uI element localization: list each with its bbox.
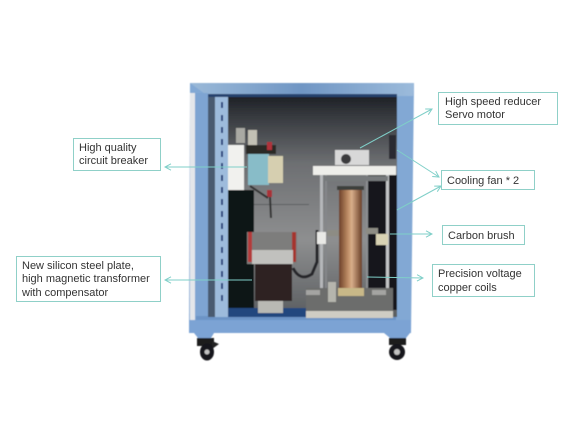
cabinet interior bbox=[228, 97, 397, 317]
label: servo motor: High speed reducer bbox=[445, 96, 541, 108]
label: circuit breaker: High quality bbox=[79, 142, 137, 154]
right caster bbox=[384, 333, 410, 360]
label: cooling fan bbox=[442, 170, 534, 190]
label: transformer bbox=[16, 256, 160, 302]
circuit breaker assembly bbox=[228, 128, 283, 218]
label: servo motor bbox=[438, 92, 558, 124]
label: copper coils: copper coils bbox=[438, 282, 497, 294]
transformer bbox=[247, 230, 317, 313]
label: transformer: with compensator bbox=[21, 287, 109, 299]
label: circuit breaker: circuit breaker bbox=[79, 155, 148, 167]
arrow: servo motor bbox=[360, 109, 432, 148]
label: carbon brush: Carbon brush bbox=[448, 230, 515, 242]
label: carbon brush bbox=[442, 226, 524, 244]
label: cooling fan: Cooling fan * 2 bbox=[447, 175, 519, 187]
arrow: copper coils bbox=[367, 277, 423, 278]
label: transformer: New silicon steel plate, bbox=[22, 260, 134, 272]
left caster bbox=[194, 333, 219, 360]
arrow: cooling fan upper bbox=[397, 150, 439, 177]
arrow: transformer bbox=[165, 279, 252, 281]
servo motor plate bbox=[335, 150, 369, 165]
label: transformer: high magnetic transformer bbox=[22, 273, 150, 285]
cooling fan bbox=[389, 135, 396, 159]
label: copper coils: Precision voltage bbox=[438, 268, 522, 280]
arrow: cooling fan lower bbox=[397, 186, 441, 210]
arrow: circuit breaker bbox=[165, 166, 247, 168]
arrow: carbon brush bbox=[390, 233, 432, 235]
cabinet frame bbox=[189, 83, 414, 333]
label: copper coils bbox=[432, 264, 534, 296]
copper coil unit bbox=[306, 166, 396, 318]
label: circuit breaker bbox=[74, 138, 160, 170]
rack strip with slots bbox=[208, 97, 228, 317]
label: servo motor: Servo motor bbox=[445, 109, 505, 121]
photo: voltage stabilizer cabinet bbox=[189, 83, 414, 360]
